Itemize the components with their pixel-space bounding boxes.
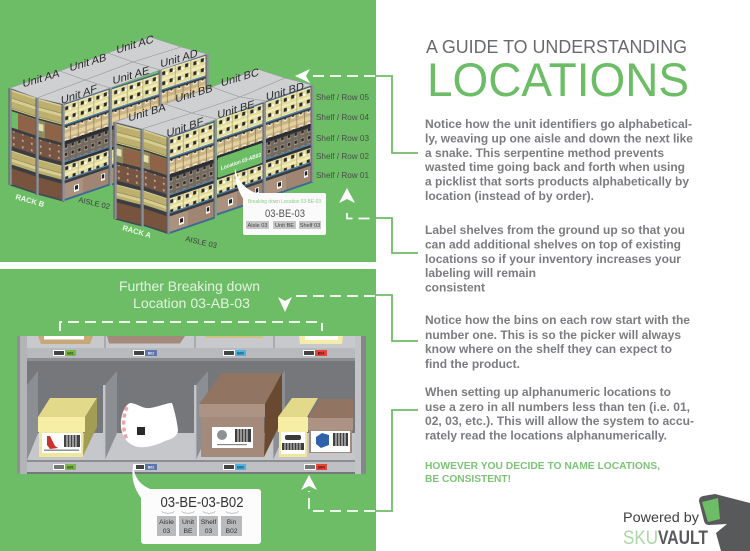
unit labels: Unit AC xyxy=(116,34,154,57)
illustration: shelf close-up xyxy=(17,336,366,474)
unit labels: Unit BE xyxy=(217,98,255,122)
illustration: rack B xyxy=(8,37,209,202)
upper bin rail: B03 xyxy=(237,352,244,356)
text block: use a zero: 02, 03, etc.). This will allow the system to accu- xyxy=(425,416,694,428)
unit labels: Unit BF xyxy=(167,116,203,140)
shelf row labels xyxy=(316,92,369,180)
highlighted location band: Location 03-AB03 xyxy=(221,153,261,172)
shelf row labels: Shelf / Row 03 xyxy=(316,133,369,143)
lower shelf floor xyxy=(27,433,355,460)
text block: label from the ground up: Label shelves from the ground up so that you xyxy=(425,225,685,237)
upper shelf boxes xyxy=(38,336,343,348)
upper bin rail: B04 xyxy=(318,352,324,356)
shelf back wall xyxy=(17,336,366,474)
text block: bins start with one: know where on the shelf they can expect to xyxy=(425,344,672,356)
arrow: shelf rows connector xyxy=(339,188,375,218)
unit labels: Unit BA xyxy=(128,101,166,125)
text block: label from the ground up xyxy=(425,225,685,294)
connector: fourth tip xyxy=(375,410,418,511)
arrow: bins connector xyxy=(278,296,375,312)
callout: bin location 03-BE-03-B02: 03 xyxy=(163,528,170,535)
rack and aisle labels: AISLE 03 xyxy=(185,234,218,250)
lower bin rail xyxy=(27,460,355,472)
text block: label from the ground up: labeling will remain xyxy=(425,268,536,280)
callout: bin location 03-BE-03-B02: Aisle xyxy=(159,519,174,526)
lower bin rail: B03 xyxy=(237,466,244,470)
title: LOCATIONS xyxy=(427,53,689,106)
unit labels: Unit BD xyxy=(266,81,304,104)
panel: further breakdown background xyxy=(0,269,376,551)
text block: use a zero: rately read the locations alphanumerically. xyxy=(425,430,667,442)
shelf row labels: Shelf / Row 05 xyxy=(316,92,369,102)
unit labels: Unit AD xyxy=(160,48,198,71)
text block: serpentine method: wasted time going back and forth when using xyxy=(424,162,685,174)
logo: powered by skuvault xyxy=(623,509,708,549)
rack and aisle labels: RACK B xyxy=(14,192,46,209)
unit labels: Unit AF xyxy=(61,83,97,107)
text block: serpentine method: a picklist that sorts products alphabetically by xyxy=(425,176,690,188)
arrow: unit identifiers connector xyxy=(295,69,375,83)
text block: label from the ground up: locations so if your inventory increases your xyxy=(425,254,682,266)
callout text: be consistent: HOWEVER YOU DECIDE TO NAME LOCATIONS, xyxy=(425,461,660,472)
callout: bin location 03-BE-03-B02: Shelf xyxy=(201,519,216,526)
callout: location 03-BE-03: Unit BE xyxy=(275,223,294,229)
logo: powered by skuvault: Powered by xyxy=(623,509,699,525)
arrow: bin start connector xyxy=(301,475,375,511)
text block: bins start with one: Notice how the bins on each row start with the xyxy=(425,315,690,327)
icon: barcode scanner xyxy=(699,494,750,551)
lower bin rail: B04 xyxy=(318,466,325,470)
unit labels: Unit BB xyxy=(175,83,213,106)
small brown box xyxy=(308,399,353,453)
rack and aisle labels: RACK A xyxy=(121,223,153,240)
callout: bin location 03-BE-03-B02: 03-BE-03-B02 xyxy=(160,495,244,511)
text block: serpentine method xyxy=(424,119,693,203)
callout: location 03-BE-03 xyxy=(235,168,326,235)
shelf row labels: Shelf / Row 02 xyxy=(316,151,369,161)
connector: second tip xyxy=(375,218,418,253)
unit labels: Unit AB xyxy=(70,52,106,74)
callout: bin location 03-BE-03-B02: B02 xyxy=(225,528,238,535)
heading: further breaking down: Location 03-AB-03 xyxy=(133,295,250,311)
unit labels: Unit AA xyxy=(23,68,60,90)
rack and aisle labels: AISLE 02 xyxy=(78,195,111,211)
unit labels xyxy=(23,34,304,140)
text block: bins start with one: number one. This is so the picker will always xyxy=(425,330,681,342)
callout: bin location 03-BE-03-B02 xyxy=(132,466,261,544)
text block: bins start with one: find the product. xyxy=(425,359,520,371)
large brown box xyxy=(199,373,282,457)
illustration: rack A xyxy=(114,69,314,234)
lower bin rail: B01 xyxy=(67,466,74,470)
text block: serpentine method: location (instead of by order). xyxy=(425,191,594,203)
text block: serpentine method: ly, weaving up one aisle and down the next like xyxy=(425,134,693,146)
callout: location 03-BE-03: Shelf 03 xyxy=(300,223,320,229)
unit labels: Unit AE xyxy=(113,65,150,87)
bracket: shelf section xyxy=(60,322,322,331)
text block: use a zero: When setting up alphanumeric locations to xyxy=(425,387,671,399)
bin dividers xyxy=(27,371,285,460)
connector: third tip xyxy=(375,295,418,341)
unit labels: Unit BC xyxy=(221,67,259,90)
callout: bin location 03-BE-03-B02: BE xyxy=(183,528,193,535)
upper shelf floor xyxy=(27,336,355,348)
connector: first tip xyxy=(375,76,418,153)
highlighted location band xyxy=(218,143,262,178)
text block: label from the ground up: can add additional shelves on top of existing xyxy=(425,240,681,252)
heading: further breaking down xyxy=(119,278,260,311)
text block: serpentine method: a snake. This serpentine method prevents xyxy=(425,148,664,160)
callout text: be consistent: BE CONSISTENT! xyxy=(425,474,511,485)
upper bin rail xyxy=(27,348,355,361)
lower bin rail: B02 xyxy=(148,466,154,470)
text block: use a zero: use a zero in all numbers less than ten (i.e. 01, xyxy=(425,402,690,414)
text block: use a zero xyxy=(425,387,694,442)
white face mask xyxy=(121,403,178,447)
callout: bin location 03-BE-03-B02: Bin xyxy=(227,519,237,526)
callout: bin location 03-BE-03-B02: Unit xyxy=(182,519,194,526)
logo: powered by skuvault: SKU xyxy=(623,527,658,549)
callout: location 03-BE-03: Breaking down Location 03-BE-03 xyxy=(248,199,321,205)
heading: further breaking down: Further Breaking down xyxy=(119,278,260,294)
callout: location 03-BE-03: 03-BE-03 xyxy=(265,208,305,220)
panel: warehouse overview background xyxy=(0,0,376,262)
yellow shoe box xyxy=(38,398,97,457)
rack and aisle labels xyxy=(14,192,218,250)
callout text: be consistent xyxy=(425,461,660,485)
upper bin rail: B01 xyxy=(67,352,74,356)
shelf row labels: Shelf / Row 01 xyxy=(316,170,369,180)
shelf uprights xyxy=(17,336,366,474)
callout: location 03-BE-03: Aisle 03 xyxy=(248,223,267,229)
logo: powered by skuvault: VAULT xyxy=(658,527,708,549)
upper bin rail: B02 xyxy=(148,352,154,356)
text block: label from the ground up: consistent xyxy=(425,282,485,294)
text block: bins start with one xyxy=(425,315,690,371)
shelf row labels: Shelf / Row 04 xyxy=(316,112,369,122)
small yellow box xyxy=(278,398,318,457)
text block: serpentine method: Notice how the unit identifiers go alphabetical- xyxy=(425,119,692,131)
callout: bin location 03-BE-03-B02: 03 xyxy=(205,528,212,535)
title: A GUIDE TO UNDERSTANDING xyxy=(426,37,687,57)
